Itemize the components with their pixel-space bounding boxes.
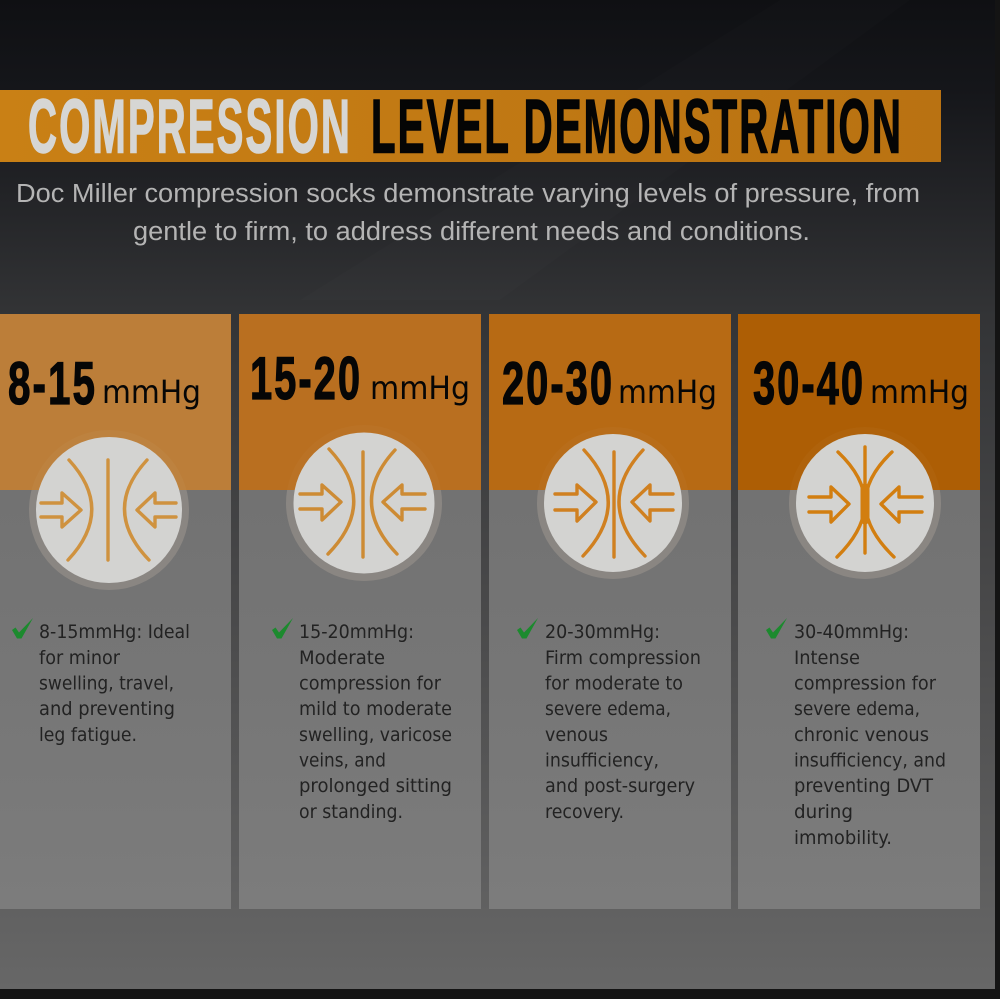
check mark: [517, 618, 538, 638]
heading: 20-30 mmHg: 20-30: [502, 350, 614, 417]
description: Firm compression: [545, 647, 701, 669]
heading: 30-40 mmHg: 30-40: [753, 350, 865, 417]
description: 15-20mmHg:: [299, 621, 414, 643]
description: [39, 621, 190, 746]
panel: 20-30 mmHg: [489, 314, 731, 909]
heading: 8-15 mmHg: 8-15: [8, 350, 97, 417]
panel: 15-20 mmHg: [239, 314, 481, 909]
description: swelling, travel,: [39, 672, 174, 694]
description: compression for: [794, 672, 936, 694]
title banner: [0, 84, 941, 170]
description: for moderate to: [545, 672, 683, 694]
heading: 15-20 mmHg: 15-20: [250, 345, 362, 412]
description: Intense: [794, 647, 860, 669]
panel: 30-40 mmHg: [738, 314, 980, 909]
description: compression for: [299, 672, 441, 694]
intro text: [16, 180, 920, 246]
description: 20-30mmHg:: [545, 621, 660, 643]
description: preventing DVT: [794, 775, 933, 797]
description: 8-15mmHg: Ideal: [39, 621, 190, 643]
icon: compression 20-30: [537, 427, 689, 579]
description: Moderate: [299, 647, 385, 669]
description: and post-surgery: [545, 775, 695, 797]
description: severe edema,: [545, 698, 671, 720]
intro text: gentle to firm, to address different needs and conditions.: [133, 218, 810, 246]
intro text: Doc Miller compression socks demonstrate varying levels of pressure, from: [16, 180, 920, 208]
check mark: [766, 618, 787, 638]
description: or standing.: [299, 801, 403, 823]
panel: 8-15 mmHg: [0, 314, 231, 909]
heading: 20-30 mmHg: mmHg: [618, 373, 717, 411]
description: [794, 621, 946, 849]
description: insufficiency, and: [794, 750, 946, 772]
description: immobility.: [794, 827, 892, 849]
heading: 8-15 mmHg: [8, 350, 201, 417]
description: chronic venous: [794, 724, 929, 746]
check mark: [12, 618, 33, 638]
description: severe edema,: [794, 698, 920, 720]
title: compression: COMPRESSION: [28, 84, 352, 170]
description: swelling, varicose: [299, 724, 452, 746]
icon: compression 8-15: [29, 430, 189, 590]
description: veins, and: [299, 750, 386, 772]
description: and preventing: [39, 698, 175, 720]
description: leg fatigue.: [39, 724, 137, 746]
description: mild to moderate: [299, 698, 452, 720]
icon: compression 30-40: [789, 427, 941, 579]
description: venous: [545, 724, 608, 746]
description: during: [794, 801, 853, 823]
description: [299, 621, 452, 823]
description: recovery.: [545, 801, 624, 823]
description: for minor: [39, 647, 120, 669]
heading: 15-20 mmHg: mmHg: [370, 369, 470, 407]
description: [545, 621, 701, 823]
check mark: [272, 618, 293, 638]
description: 30-40mmHg:: [794, 621, 909, 643]
heading: 30-40 mmHg: mmHg: [870, 373, 969, 411]
heading: 8-15 mmHg: mmHg: [102, 373, 201, 411]
description: insufficiency,: [545, 750, 659, 772]
description: prolonged sitting: [299, 775, 452, 797]
icon: compression 15-20: [286, 425, 442, 581]
